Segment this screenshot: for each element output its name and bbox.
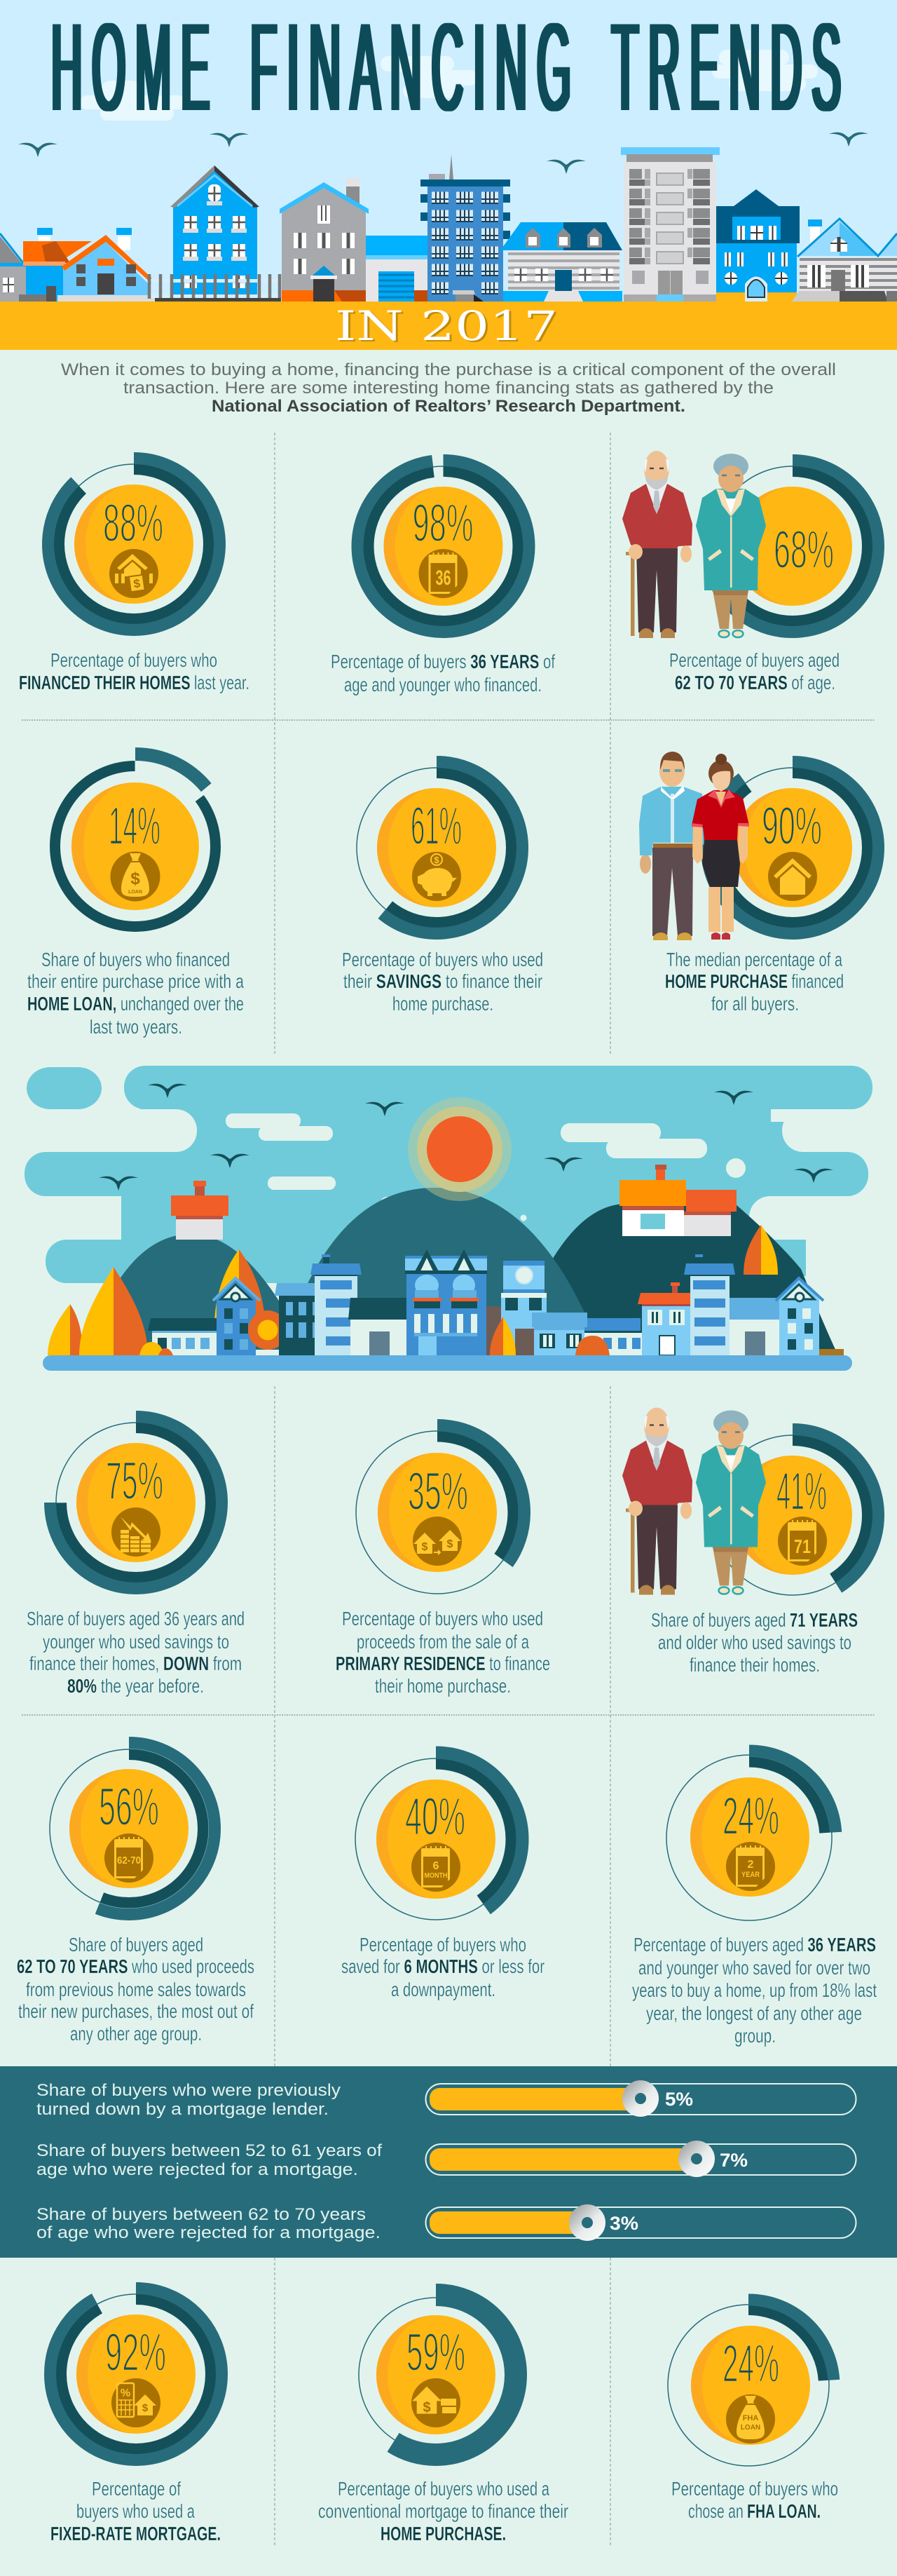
stat: 59% conventional: 59%	[406, 2323, 465, 2382]
young man	[639, 752, 704, 940]
caption: 56%: Share of buyers aged	[69, 1934, 203, 1955]
icon: FHA loan bag	[726, 2394, 775, 2443]
subtitle: in 2017: IN 2017	[337, 304, 560, 351]
caption: 92%: buyers who used a	[76, 2500, 195, 2522]
caption: 41%: Share of buyers aged 71 YEARS	[651, 1609, 858, 1631]
house: grey townhouse	[280, 178, 369, 301]
text: previously turned down	[36, 2081, 341, 2119]
caption: 59%: HOME PURCHASE.	[381, 2523, 506, 2544]
caption: 56%: 62 TO 70 YEARS who used proceeds	[17, 1955, 254, 1977]
caption: 41%	[651, 1609, 858, 1676]
icon: calendar 62-70	[104, 1833, 153, 1883]
icon: calendar 6 month: 6	[433, 1860, 439, 1872]
stat: 75% savings under 36	[50, 1416, 221, 1589]
caption: 59%	[318, 2478, 568, 2544]
caption: 61%: their SAVINGS to finance their	[343, 970, 542, 992]
stat: 24% FHA loan	[663, 2300, 834, 2471]
caption: 56%: from previous home sales towards	[26, 1979, 246, 2000]
right mountain	[547, 1204, 838, 1355]
caption: 35%: their home purchase.	[375, 1675, 511, 1697]
icon: calculator and house: %	[121, 2387, 130, 2399]
stat: 68% aged 62 to 70: 68%	[774, 520, 834, 580]
small tree centre	[490, 1317, 516, 1355]
caption: 56%	[17, 1934, 254, 2045]
text: ages 62 to 70	[36, 2205, 381, 2242]
icon: calendar 2 year	[726, 1842, 775, 1891]
stat: 90% median: 90%	[762, 796, 822, 856]
blue Victorian house	[716, 189, 800, 301]
icon: FHA loan bag: FHA	[743, 2414, 758, 2422]
illustration: older couple	[622, 451, 766, 638]
caption: FHA 24%: chose an FHA LOAN.	[688, 2500, 821, 2522]
caption: 75%	[27, 1608, 245, 1697]
hill house right	[619, 1165, 737, 1236]
ground	[43, 1355, 852, 1371]
bar: 3%	[426, 2204, 856, 2241]
caption: 88%: FINANCED THEIR HOMES last year.	[19, 672, 249, 693]
caption: 61%	[342, 949, 543, 1015]
caption: 59%: Percentage of buyers who used a	[338, 2478, 549, 2500]
stat: 88% financed	[48, 459, 220, 630]
illustration: young couple	[639, 752, 749, 940]
caption: 92%	[50, 2478, 221, 2544]
caption: 56%: any other age group.	[70, 2023, 202, 2045]
caption: 24%	[632, 1934, 877, 2047]
apartment tower blue	[420, 154, 510, 301]
caption: 35%: Percentage of buyers who used	[342, 1608, 543, 1629]
caption: 35%: proceeds from the sale of a	[357, 1631, 529, 1653]
caption: 40%	[341, 1934, 545, 2000]
text: previously turned down: turned down by a mortgage lender.	[36, 2100, 329, 2119]
icon: calendar 62-70: 62-70	[117, 1855, 141, 1866]
text: ages 52 to 61: age who were rejected for a mortgage.	[36, 2160, 358, 2179]
bar: 7%: 7%	[720, 2150, 748, 2171]
grid divider lines	[22, 433, 875, 2546]
mansard house	[500, 222, 622, 301]
caption: 24%: Percentage of buyers aged 36 YEARS	[634, 1934, 876, 1955]
orange roof house	[638, 1282, 694, 1355]
intro paragraph: National Association of Realtors’ Research Department.	[212, 397, 685, 416]
right white house	[730, 1298, 779, 1355]
sun	[408, 1097, 512, 1201]
striped tower	[310, 1254, 362, 1355]
middle mountain	[280, 1188, 603, 1355]
caption: 92%: FIXED-RATE MORTGAGE.	[50, 2523, 221, 2544]
gray high-rise	[621, 147, 720, 301]
small building behind	[256, 1350, 279, 1355]
bar: 7%	[426, 2141, 856, 2177]
icon: house and cash	[411, 2378, 460, 2427]
header birds	[18, 133, 868, 174]
caption: 98%: age and younger who financed.	[344, 674, 542, 696]
caption: 75%: Share of buyers aged 36 years and	[27, 1608, 245, 1629]
caption: 90%	[665, 949, 844, 1015]
caption: 35%: PRIMARY RESIDENCE to finance	[336, 1653, 550, 1674]
icon: falling chart with coins	[111, 1507, 160, 1557]
intro paragraph: When it comes to buying a home, financing the purchase is a critical component of the overall	[61, 360, 836, 379]
stat: 24% FHA loan: 24%	[723, 2334, 779, 2394]
intro paragraph	[61, 360, 836, 416]
icon: house and dollar	[109, 549, 158, 598]
icon: calendar 36: 36	[436, 567, 451, 590]
caption: 41%: finance their homes.	[690, 1654, 820, 1676]
icon: calendar 2 year: 2	[748, 1859, 754, 1871]
stat: 92% fixed-rate	[50, 2289, 221, 2460]
caption: 98%	[331, 651, 555, 696]
caption: 75%: younger who used savings to	[43, 1631, 229, 1653]
text: ages 52 to 61	[36, 2141, 382, 2179]
icon: calendar 6 month: MONTH	[425, 1872, 447, 1880]
caption: 75%: 80% the year before.	[67, 1675, 204, 1697]
stat: 68% aged 62 to 70	[706, 460, 879, 632]
caption: 61%: home purchase.	[392, 993, 493, 1015]
left mountain	[105, 1234, 297, 1355]
stat: 56% aged 62 to 70: 56%	[99, 1777, 159, 1837]
stat: 40% six months: 40%	[405, 1787, 465, 1847]
caption: 68%: 62 TO 70 YEARS of age.	[675, 672, 835, 693]
caption: 88%	[19, 649, 249, 693]
landscape illustration	[0, 1066, 897, 1371]
stat: 75% savings under 36: 75%	[106, 1451, 163, 1511]
caption: 61%: Percentage of buyers who used	[342, 949, 543, 970]
text: ages 52 to 61: Share of buyers between 52 to 61 years of	[36, 2141, 382, 2160]
icon: calendar 36	[419, 549, 468, 598]
intro paragraph: transaction. Here are some interesting home financing stats as gathered by the	[123, 379, 774, 398]
caption: 56%: their new purchases, the most out of	[18, 2000, 254, 2022]
clouds behind title	[80, 50, 818, 121]
orange bush	[575, 1336, 610, 1355]
caption: 35%	[336, 1608, 550, 1697]
stat: 56% aged 62 to 70	[43, 1743, 214, 1914]
caption: 14%: HOME LOAN, unchanged over the	[27, 993, 244, 1015]
caption: 59%: conventional mortgage to finance their	[318, 2500, 568, 2522]
caption: 75%: finance their homes, DOWN from	[29, 1653, 242, 1674]
stat: 61% savings: 61%	[411, 796, 462, 856]
caption: 14%	[27, 949, 244, 1038]
caption: 14%: their entire purchase price with a	[27, 970, 244, 992]
yellow banner	[0, 301, 897, 350]
caption: 40%: saved for 6 MONTHS or less for	[341, 1955, 545, 1977]
icon: calendar 2 year: YEAR	[741, 1871, 760, 1879]
blue-roof houses	[532, 1313, 642, 1355]
stat: 98% aged 36 and younger	[357, 460, 529, 632]
clock tower	[501, 1261, 547, 1355]
lollipop tree	[248, 1310, 287, 1355]
icon: money bag: LOAN	[128, 890, 142, 895]
dark tower	[275, 1283, 331, 1355]
caption: 14%: Share of buyers who financed	[41, 949, 230, 970]
caption: 24%: group.	[734, 2025, 776, 2047]
icon: piggy bank	[412, 852, 461, 901]
title: HOME	[51, 0, 219, 137]
icon: FHA loan bag: LOAN	[741, 2424, 760, 2432]
icon: money bag: $	[130, 869, 140, 888]
caption: FHA 24%	[671, 2478, 838, 2522]
stat: 59% conventional	[356, 2295, 516, 2455]
icon: house to house: $	[422, 1541, 428, 1553]
stat: 90% median	[706, 761, 879, 934]
stat: 24% over two years: 24%	[723, 1787, 779, 1846]
caption: 98%: Percentage of buyers 36 YEARS of	[331, 651, 555, 672]
young woman	[692, 754, 749, 940]
icon: house to house: $	[447, 1538, 453, 1550]
icon: calculator and house: $	[142, 2402, 149, 2414]
low white building	[148, 1318, 217, 1355]
caption: 40%: Percentage of buyers who	[360, 1934, 526, 1955]
garage	[366, 236, 429, 301]
stat: 14% home loan: 14%	[109, 796, 160, 856]
icon: money bag	[111, 851, 160, 902]
icon: house to house	[413, 1517, 462, 1566]
caption: 40%: a downpayment.	[391, 1979, 495, 2000]
stat: 35% primary residence	[350, 1425, 524, 1600]
icon: calendar 6 month	[411, 1843, 460, 1892]
icon: house	[768, 852, 817, 901]
caption: 14%: last two years.	[90, 1016, 182, 1038]
header street of houses	[0, 147, 897, 301]
caption: FHA 24%: Percentage of buyers who	[671, 2478, 838, 2500]
narrow blue house	[213, 1278, 260, 1355]
icon: house and cash: $	[423, 2400, 431, 2415]
right narrow house	[776, 1278, 823, 1355]
illustration: older couple	[622, 1408, 766, 1594]
icon: house and dollar: $	[132, 576, 142, 591]
white clouds	[226, 1113, 746, 1221]
house: tall blue gable	[170, 165, 259, 301]
stat: 35% primary residence: 35%	[408, 1462, 468, 1521]
subtitle: in 2017: IN 2017	[335, 302, 558, 350]
stat: 40% six months	[349, 1752, 523, 1926]
caption: 92%: Percentage of	[92, 2478, 181, 2500]
right striped tower	[684, 1254, 735, 1355]
text: ages 62 to 70: of age who were rejected for a mortgage.	[36, 2223, 381, 2242]
sky blob	[0, 1066, 897, 1283]
caption: 68%	[669, 649, 840, 693]
bar: 3%: 3%	[610, 2213, 638, 2234]
panel: mortgage rejections	[0, 2066, 897, 2258]
iron fence	[148, 274, 281, 301]
stat: 24% over two years	[662, 1751, 836, 1925]
icon: piggy bank: $	[434, 855, 439, 865]
brown wall	[486, 1306, 501, 1355]
caption: 88%: Percentage of buyers who	[50, 649, 217, 671]
stat: 41% aged 71 and older	[706, 1429, 879, 1601]
house: orange roof cottage	[19, 228, 154, 301]
house: far right	[792, 219, 897, 301]
sky background	[0, 0, 897, 302]
bar: 5%: 5%	[665, 2089, 693, 2110]
icon: calendar 71: 71	[794, 1536, 811, 1557]
text: previously turned down: Share of buyers who were previously	[36, 2081, 341, 2100]
icon: calculator and house	[111, 2378, 160, 2427]
stat: 61% savings	[350, 761, 523, 934]
caption: 90%: HOME PURCHASE financed	[665, 970, 844, 992]
house: far left grey	[0, 233, 26, 301]
stat: 98% aged 36 and younger: 98%	[412, 494, 474, 553]
stat: 41% aged 71 and older: 41%	[776, 1462, 827, 1521]
text: ages 62 to 70: Share of buyers between 62 to 70 years	[36, 2205, 366, 2224]
birds	[99, 1084, 833, 1191]
hill house left	[171, 1181, 228, 1240]
caption: 90%: for all buyers.	[711, 993, 799, 1015]
bar: 5%	[426, 2080, 856, 2117]
stat: 88% financed: 88%	[103, 494, 163, 553]
stat: 14% home loan	[43, 754, 227, 938]
stat: 92% fixed-rate: 92%	[105, 2323, 166, 2382]
trees and town	[48, 1225, 844, 1355]
icon: calendar 71	[778, 1517, 827, 1566]
small white house	[348, 1298, 410, 1355]
central building	[405, 1249, 487, 1355]
